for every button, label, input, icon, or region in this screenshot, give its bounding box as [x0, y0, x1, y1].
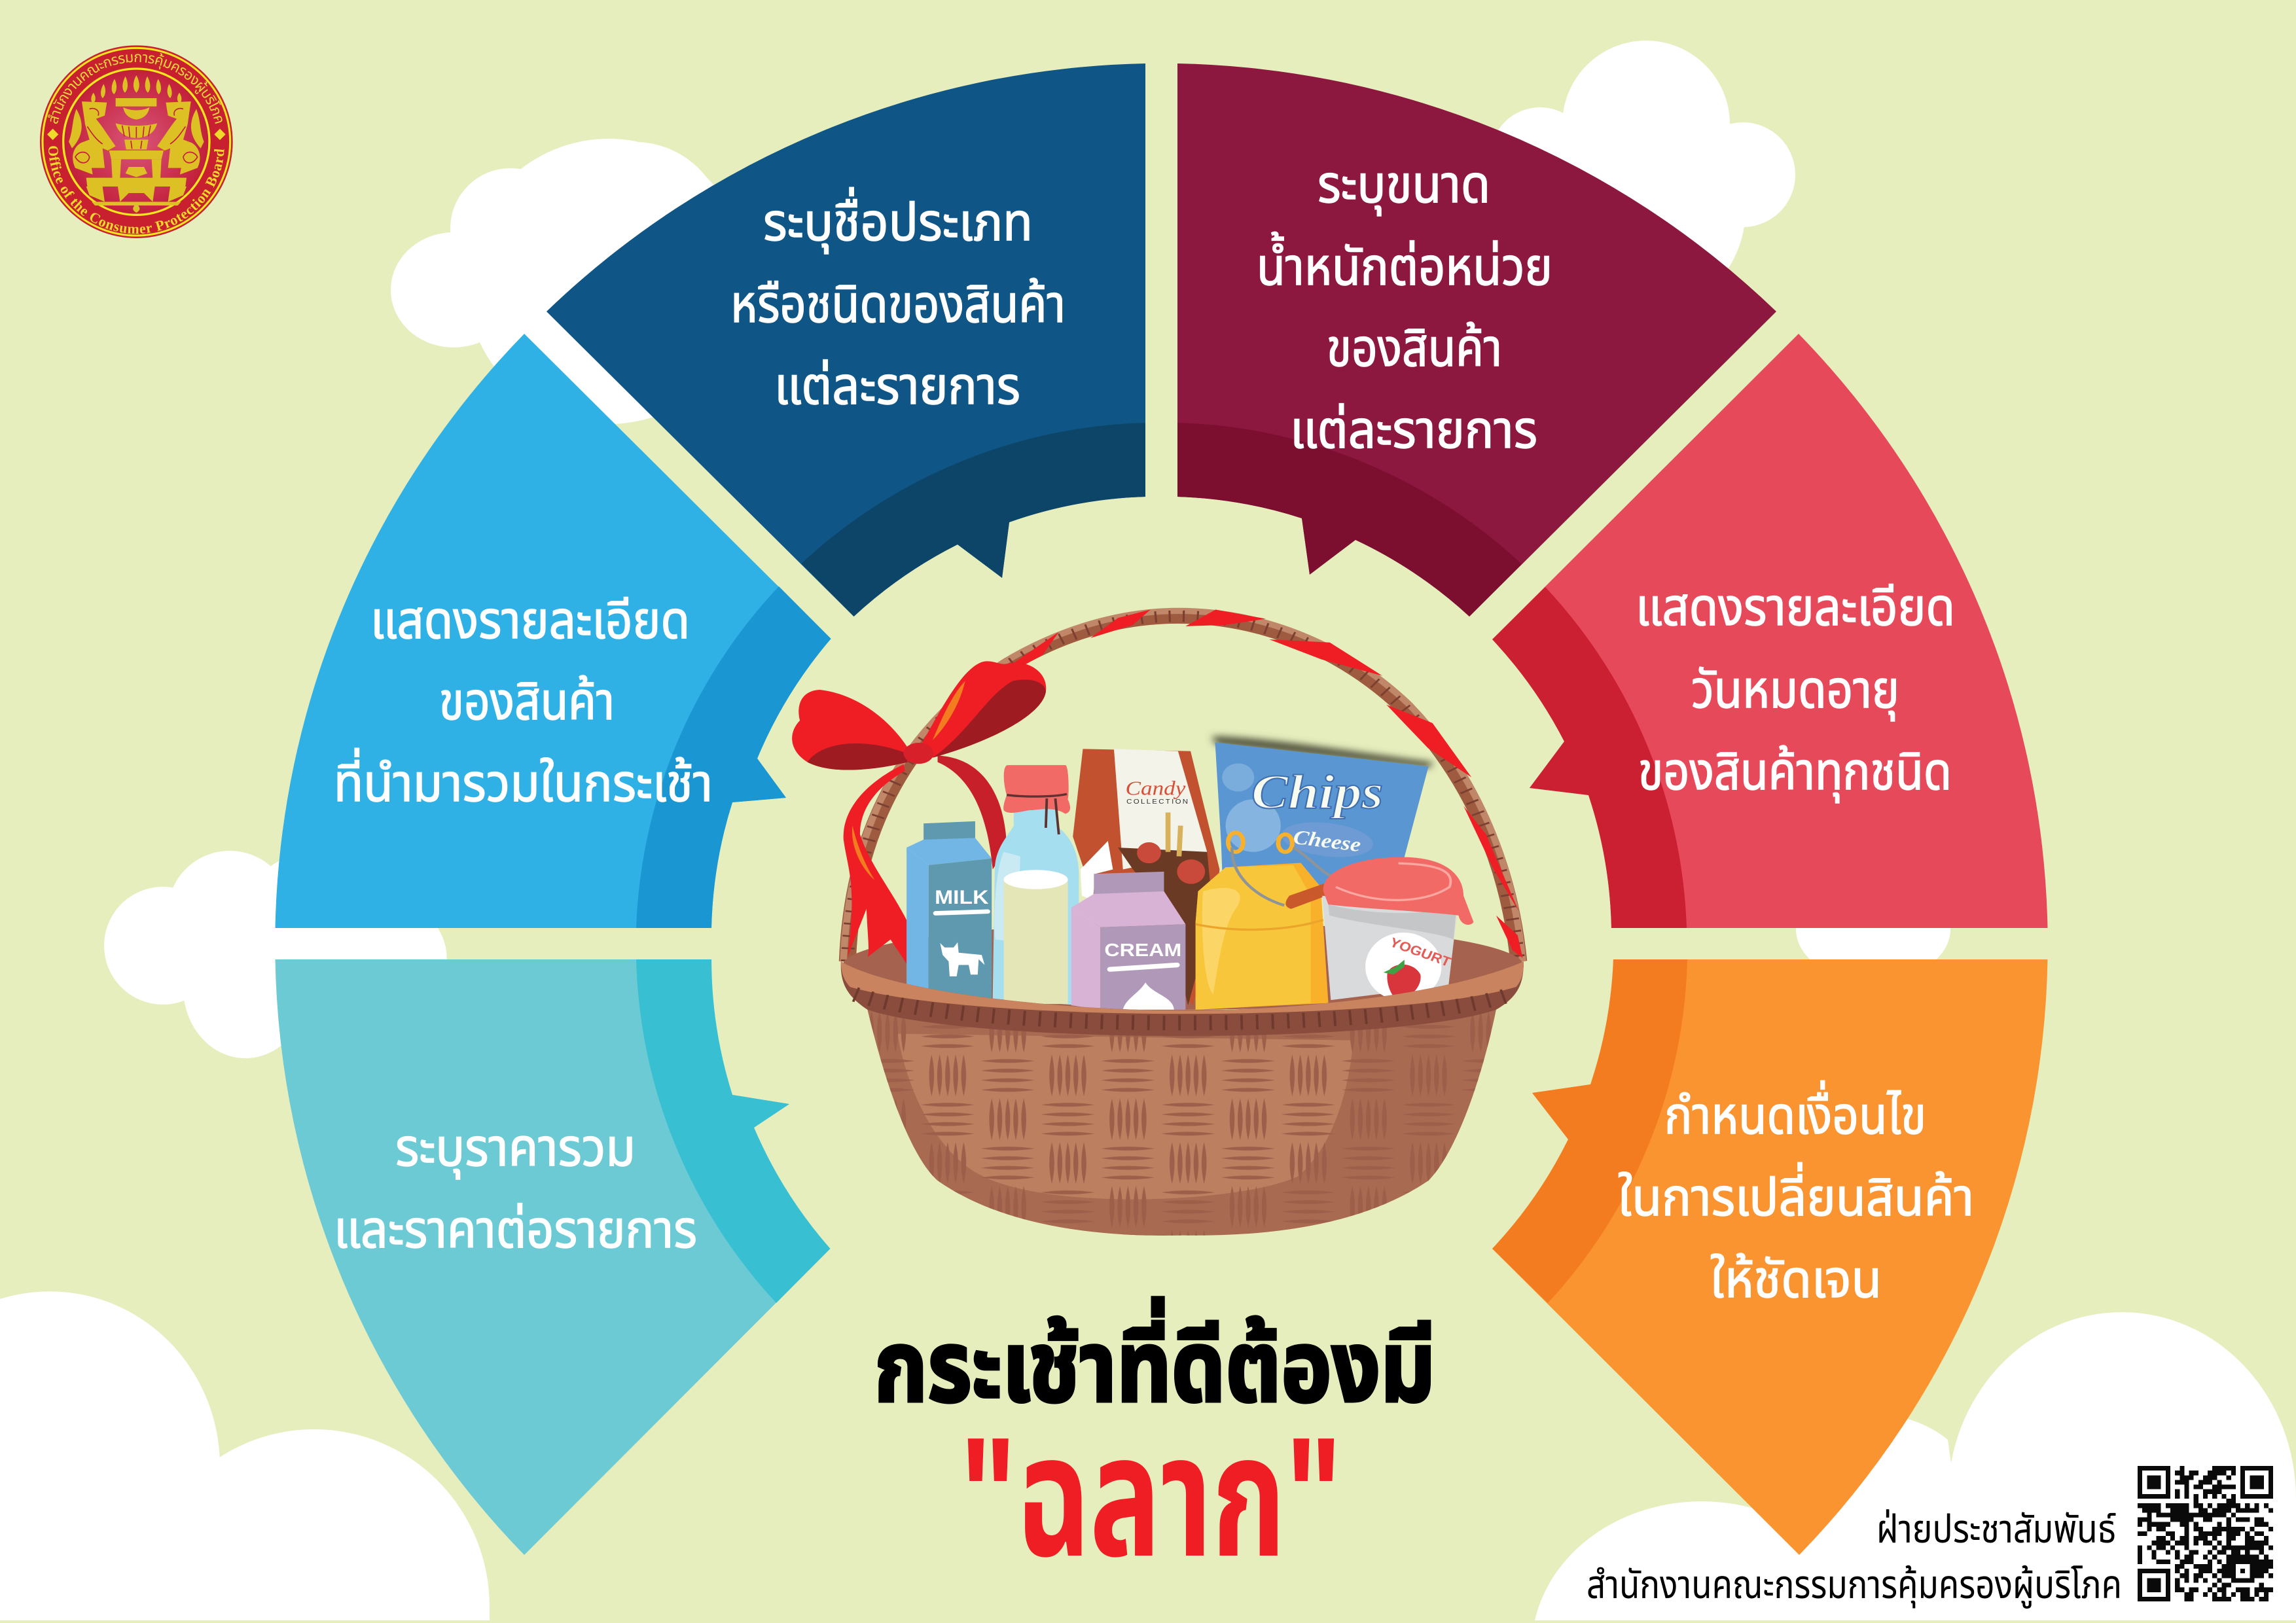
cloud: bottom right	[1535, 1312, 2296, 1620]
panel text: size and weight: น้ำหนักต่อหน่วย	[1257, 232, 1552, 296]
seal Thai name: สำนักงานคณะกรรมการคุ้มครองผู้บริโภค	[48, 53, 223, 124]
title line 2: "ฉลาก"	[960, 1402, 1342, 1592]
seal English name: Office of the Consumer Protection Board	[48, 146, 224, 234]
cloud: bottom left	[0, 1291, 490, 1620]
flame row	[91, 75, 181, 103]
panel text: size and weight: ระบุขนาด	[1318, 155, 1490, 216]
panel text: exchange conditions: ในการเปลี่ยนสินค้า	[1618, 1162, 1974, 1226]
panel text: expiry date: แสดงรายละเอียด	[1636, 578, 1955, 636]
bow	[792, 661, 1046, 770]
milk carton: MILK	[935, 886, 989, 908]
panel text: total price: ระบุราคารวม	[395, 1118, 636, 1179]
illustration: gift basket	[792, 609, 1524, 1236]
yogurt tub	[1322, 857, 1473, 1001]
pedestal bowl	[116, 98, 157, 149]
right guardian lion	[157, 101, 204, 175]
panel text: basket details: ที่นำมารวมในกระเช้า	[334, 748, 713, 812]
cream carton	[1071, 872, 1185, 1012]
title	[874, 1297, 1435, 1592]
panel text: basket details: ของสินค้า	[439, 672, 615, 730]
panel: product type (dark blue)	[547, 63, 1145, 616]
panel text: size and weight	[1257, 155, 1552, 459]
chips bag	[1212, 736, 1433, 896]
chips bag: Chips	[1251, 766, 1383, 819]
panel text: exchange conditions	[1618, 1080, 1974, 1308]
panel text: total price: และราคาต่อรายการ	[334, 1200, 697, 1258]
seal emblem	[69, 75, 204, 213]
panel: total price (teal)	[275, 959, 830, 1555]
ribbon wrapped on handle	[1008, 609, 1522, 958]
title line 1: กระเช้าที่ดีต้องมี	[874, 1297, 1435, 1423]
cloud: top right	[1490, 41, 1795, 319]
milk bottle	[993, 765, 1079, 1005]
panel text: product type: หรือชนิดของสินค้า	[730, 275, 1066, 333]
panel text: basket details	[334, 591, 713, 812]
panel text: size and weight: แต่ละรายการ	[1290, 401, 1537, 459]
panel text: product type	[730, 187, 1066, 415]
cloud: left middle	[104, 851, 446, 1058]
panel text: basket details: แสดงรายละเอียด	[370, 591, 690, 649]
panel text: expiry date: ของสินค้าทุกชนิด	[1638, 742, 1952, 803]
basket interior	[842, 922, 1524, 1010]
table and stand	[86, 151, 187, 213]
panel text: expiry date: วันหมดอายุ	[1691, 660, 1899, 721]
left guardian lion	[69, 101, 116, 175]
panel text: product type: แต่ละรายการ	[774, 357, 1020, 415]
cloud: right middle	[1796, 877, 1950, 982]
panel text: exchange conditions: กำหนดเงื่อนไข	[1664, 1080, 1926, 1145]
milk carton	[906, 821, 992, 999]
panel text: total price	[334, 1118, 697, 1258]
chips bag: Cheese	[1292, 827, 1362, 857]
yogurt tub: YOGURT	[1388, 935, 1454, 970]
ribbon tails	[844, 755, 1007, 964]
panel: size and weight (dark red)	[1177, 63, 1776, 616]
panel text: expiry date	[1636, 578, 1955, 803]
QR code	[2138, 1466, 2273, 1601]
candy bag: Candy	[1126, 778, 1186, 800]
candy bag	[1073, 749, 1219, 1005]
footer credit text: ฝ่ายประชาสัมพันธ์	[1876, 1507, 2116, 1551]
basket body	[867, 1010, 1496, 1236]
footer credit text: สำนักงานคณะกรรมการคุ้มครองผู้บริโภค	[1587, 1563, 2122, 1609]
milk can	[1196, 832, 1339, 1010]
seal rings	[40, 45, 233, 238]
panel: exchange conditions (orange)	[1492, 959, 2047, 1555]
seal diamonds	[47, 129, 226, 140]
cream carton: CREAM	[1104, 940, 1181, 961]
basket handle	[844, 611, 1522, 961]
panel text: product type: ระบุชื่อประเภท	[763, 187, 1033, 254]
basket rim	[841, 961, 1524, 1036]
panel: expiry date (red)	[1492, 334, 2047, 928]
candy bag: COLLECTION	[1126, 798, 1189, 806]
cloud: top left	[391, 139, 751, 424]
panel text: size and weight: ของสินค้า	[1327, 319, 1502, 377]
panel: basket details (light blue)	[275, 334, 831, 928]
footer credit text	[1587, 1507, 2122, 1609]
panel text: exchange conditions: ให้ชัดเจน	[1710, 1250, 1882, 1308]
logo: Office of the Consumer Protection Board seal	[40, 45, 233, 238]
